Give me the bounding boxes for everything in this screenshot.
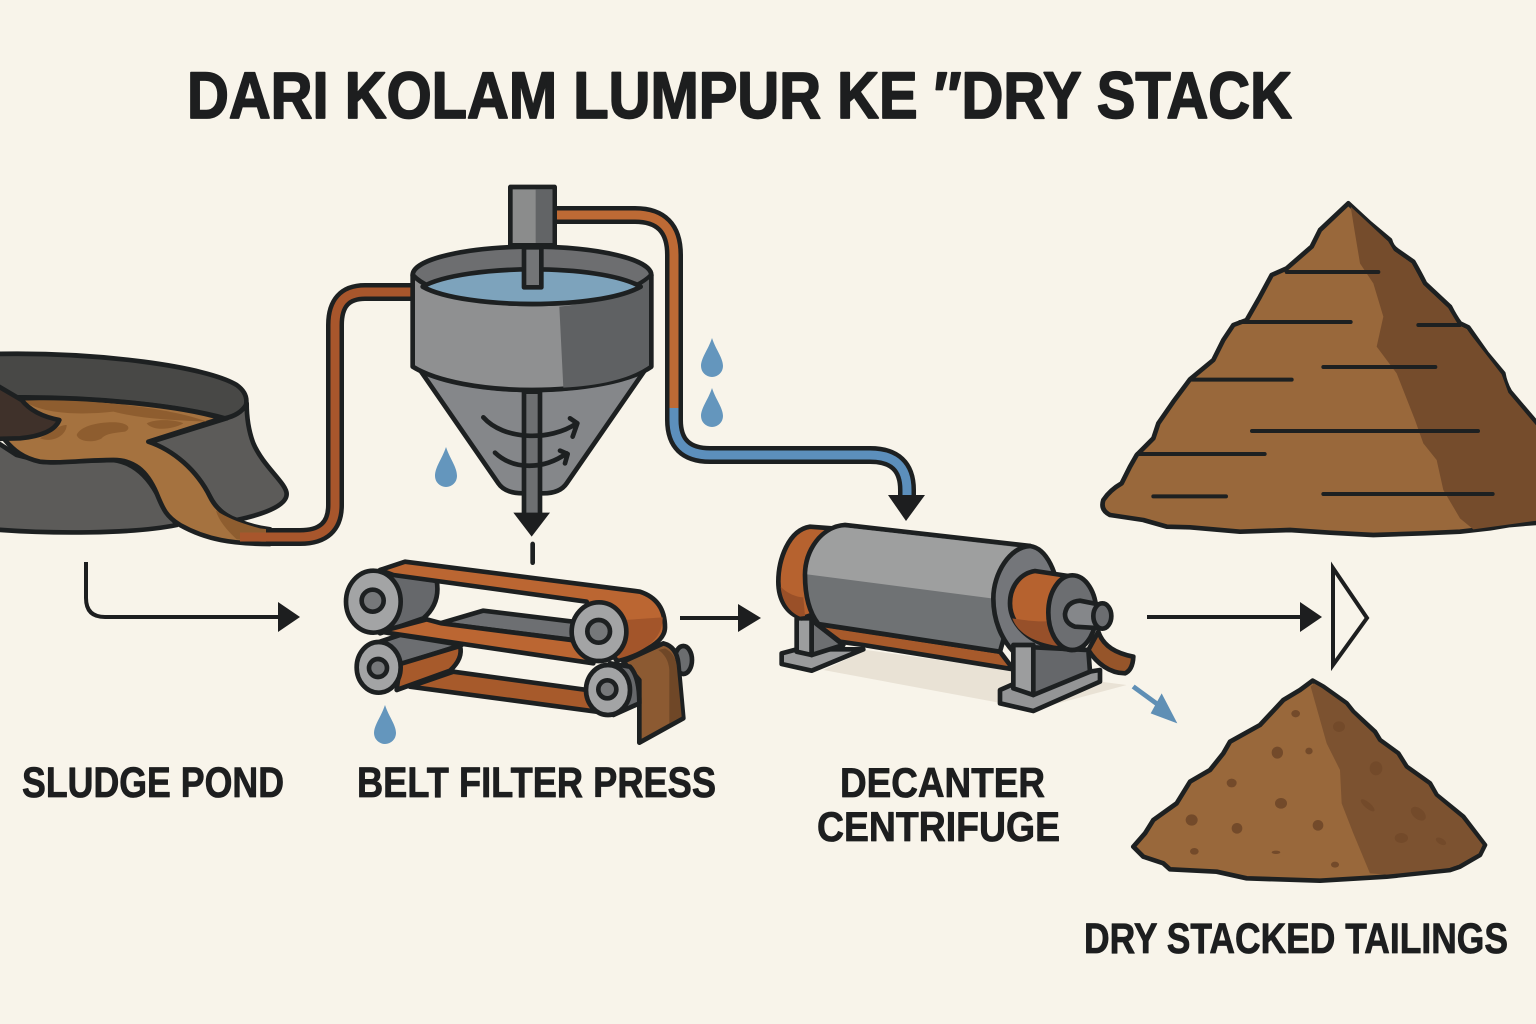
dry stacked tailings small pile	[1133, 681, 1485, 881]
outlined triangle marker	[1333, 568, 1367, 665]
water drop	[435, 447, 457, 487]
orange collar	[1010, 571, 1072, 650]
dark rock	[0, 383, 59, 439]
lower right cylinder	[610, 663, 639, 715]
belt shaded fold	[618, 617, 663, 659]
sludge dark patches	[23, 400, 268, 541]
lower right roller	[586, 665, 630, 715]
belt filter press	[346, 562, 692, 743]
blue discharge arrow	[1132, 685, 1177, 723]
water drop	[701, 388, 723, 427]
stirring shaft	[524, 247, 541, 287]
motor housing	[510, 187, 555, 245]
dry stack large pile	[1102, 203, 1536, 535]
rear orange end	[778, 527, 832, 618]
water surface	[423, 269, 641, 304]
label: sludge pond: SLUDGE POND	[22, 759, 284, 807]
tank body shaded side	[559, 279, 649, 388]
shaft	[1065, 601, 1111, 629]
title: DARI KOLAM LUMPUR KE ″DRY STACK	[187, 58, 1292, 132]
upper run of belt	[380, 562, 665, 661]
tank rim	[413, 247, 651, 303]
knob behind	[675, 646, 692, 674]
drum end disc	[993, 546, 1058, 667]
discharged sheet	[623, 643, 683, 743]
lower run of upper belt	[380, 619, 593, 663]
upper left roller	[346, 571, 401, 633]
pond back wall	[0, 354, 246, 418]
swirl arrows	[483, 417, 577, 466]
water drop	[374, 705, 396, 744]
upper right roller	[572, 602, 626, 661]
small pile shaded side	[1311, 683, 1483, 875]
label: belt filter press: BELT FILTER PRESS	[357, 759, 716, 807]
arrow: press to centrifuge	[680, 604, 761, 632]
outflow arrowhead	[513, 513, 550, 537]
decanter centrifuge	[778, 525, 1177, 723]
cone	[420, 370, 645, 493]
label: centrifuge: CENTRIFUGE	[817, 803, 1060, 850]
drop tick	[526, 544, 540, 563]
lower belt	[410, 672, 597, 712]
collar face	[1048, 575, 1096, 650]
thickener tank	[413, 187, 651, 563]
label: decanter: DECANTER	[840, 759, 1045, 806]
upper left cylinder	[373, 572, 437, 633]
main drum	[805, 525, 1030, 652]
pile body	[1102, 203, 1536, 535]
small pile body	[1133, 681, 1485, 881]
clods	[1186, 710, 1447, 868]
arrowhead: into centrifuge	[888, 495, 925, 521]
sludge surface and overflow	[5, 398, 270, 544]
pipe: thickener to centrifuge	[555, 215, 907, 500]
arrow: centrifuge to stack	[1147, 602, 1322, 632]
lower left roller	[357, 642, 401, 693]
arrow: pond to press	[86, 562, 300, 632]
lower left belt wrap	[397, 646, 461, 690]
bottom orange band	[817, 624, 1013, 669]
drum highlight	[807, 527, 1022, 598]
sludge pond	[0, 354, 287, 544]
terrace lines	[1137, 272, 1493, 496]
discharge chute	[1088, 632, 1133, 673]
tank body	[413, 275, 651, 390]
lower left cylinder top	[380, 635, 462, 664]
pipe: pond to thickener	[240, 292, 415, 537]
right foot	[1000, 645, 1100, 711]
ground shadow	[823, 650, 1127, 710]
left foot	[782, 618, 863, 671]
pond front wall left	[0, 440, 177, 532]
middle plate	[440, 611, 573, 640]
pond front wall right	[148, 403, 287, 520]
pile shaded side	[1351, 207, 1536, 529]
centre column	[524, 392, 540, 517]
water drop	[701, 338, 723, 377]
